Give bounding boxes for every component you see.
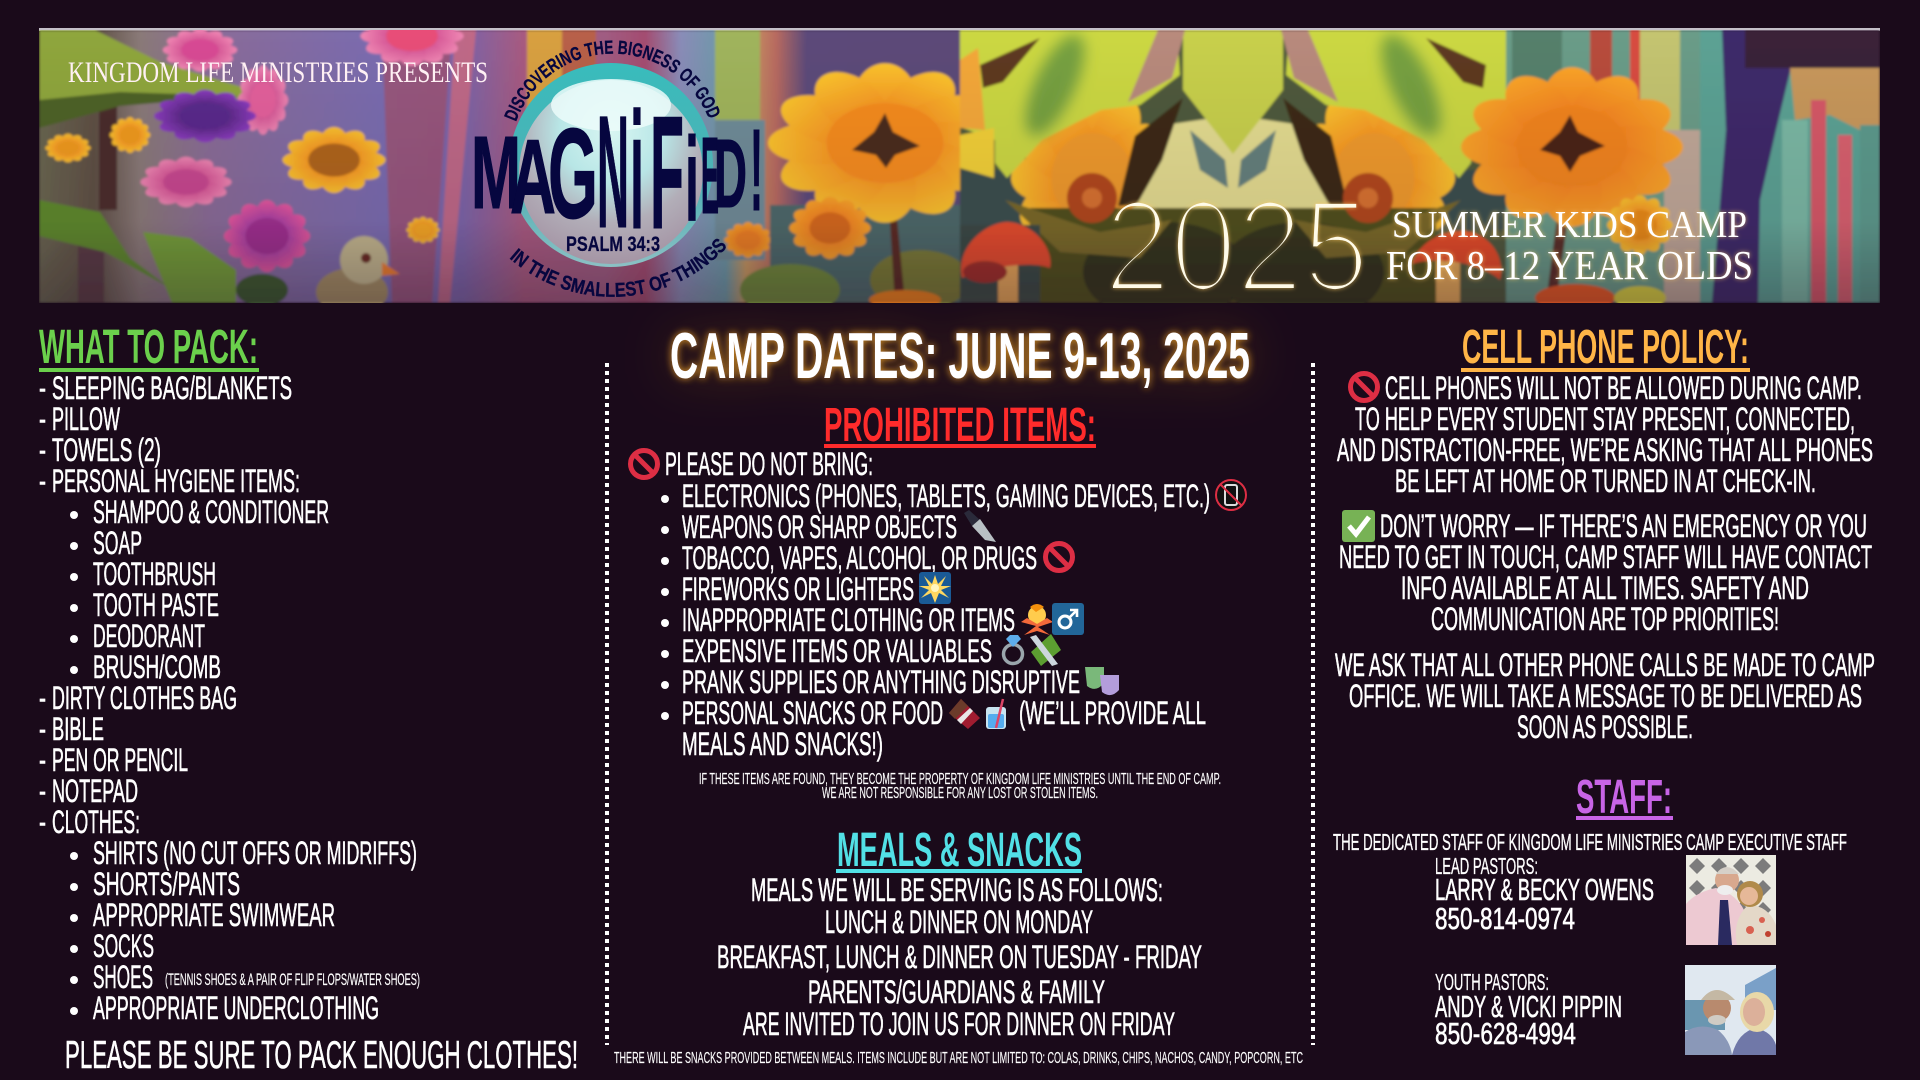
icon: theatre masks: [1085, 667, 1119, 695]
panel: centre column: [614, 319, 1303, 1067]
reassurance paragraph: [1339, 508, 1872, 637]
meals text: LUNCH & DINNER ON MONDAY: [825, 904, 1093, 940]
packing list: SOAP: [93, 525, 142, 561]
icon: drink: [986, 699, 1006, 729]
packing list: SHOES: [93, 959, 153, 995]
right orange flower: [1547, 220, 1568, 289]
lead pastors: LEAD PASTORS:: [1435, 853, 1538, 879]
packing list: -: [39, 432, 46, 468]
heading: prohibited items: PROHIBITED ITEMS:: [824, 399, 1096, 452]
prohibited list: WEAPONS OR SHARP OBJECTS: [682, 509, 957, 545]
youth pastors: 850-628-4994: [1435, 1016, 1576, 1051]
packing list: SHORTS/PANTS: [93, 866, 240, 902]
icon: ring: [1004, 635, 1022, 664]
lower centre foliage: [770, 205, 960, 303]
right trees: [1698, 30, 1860, 303]
prohibited list: ELECTRONICS (PHONES, TABLETS, GAMING DEVICES, ETC.): [682, 478, 1210, 514]
logo word MAGNiFiED!: E: [701, 115, 719, 237]
packing list: SOCKS: [93, 928, 154, 964]
youth pastors: ANDY & VICKI PIPPIN: [1435, 989, 1622, 1024]
packing list: -: [39, 680, 46, 716]
prohibited list: [661, 478, 1210, 762]
packing list: SHIRTS (NO CUT OFFS OR MIDRIFFS): [93, 835, 417, 871]
icon: prohibited: [630, 450, 658, 478]
packing list: BIBLE: [52, 711, 104, 747]
prohibited list: FIREWORKS OR LIGHTERS: [682, 571, 914, 607]
packing list: SHAMPOO & CONDITIONER: [93, 494, 329, 530]
packing list: BRUSH/COMB: [93, 649, 221, 685]
bottom foliage: [1533, 282, 1616, 303]
panel: what to pack: [39, 321, 578, 1077]
icon: fireworks: [919, 572, 951, 604]
packing list: -: [39, 401, 46, 437]
youth pastors: YOUTH PASTORS:: [1435, 969, 1549, 995]
icon: knife: [964, 510, 996, 542]
phone calls paragraph: SOON AS POSSIBLE.: [1517, 709, 1693, 745]
heading: staff: [1576, 771, 1673, 824]
icon: flying money: [1030, 634, 1061, 666]
logo word MAGNiFiED!: N: [597, 82, 629, 261]
prohibited list: (WE’LL PROVIDE ALL: [1019, 695, 1206, 731]
logo arc text bottom: IN THE SMALLEST OF THINGS: [510, 238, 726, 297]
packing list: -: [39, 742, 46, 778]
banner top edge: [39, 28, 1880, 31]
icon: chocolate: [949, 699, 980, 729]
packing list: -: [39, 370, 46, 406]
banner presenter line: KINGDOM LIFE MINISTRIES PRESENTS: [68, 56, 488, 89]
banner camp subtitle: [1386, 204, 1753, 288]
logo word MAGNiFiED!: D: [714, 119, 747, 228]
prohibited list: TOBACCO, VAPES, ALCOHOL, OR DRUGS: [682, 540, 1037, 576]
youth pastors: [1435, 969, 1622, 1051]
heading: meals and snacks: [836, 824, 1082, 877]
bubble: [509, 63, 713, 267]
logo: magnified bubble: [471, 40, 763, 297]
snacks note: THERE WILL BE SNACKS PROVIDED BETWEEN MEALS. ITEMS INCLUDE BUT ARE NOT LIMITED TO: COLAS, DRINKS, CHIPS, NACHOS, CANDY, POPCORN, ETC: [614, 1050, 1303, 1067]
heading: what to pack: [39, 321, 259, 374]
packing list: DIRTY CLOTHES BAG: [52, 680, 237, 716]
dotted column dividers: [607, 363, 1313, 1045]
heading: meals and snacks: MEALS & SNACKS: [837, 824, 1082, 877]
meals text: MEALS WE WILL BE SERVING IS AS FOLLOWS:: [751, 872, 1163, 908]
heading: cell phone policy: [1461, 321, 1750, 374]
packing list: -: [39, 804, 46, 840]
phone calls paragraph: [1335, 647, 1875, 745]
right forest backdrop: [1504, 30, 1702, 303]
packing list: SLEEPING BAG/BLANKETS: [52, 370, 292, 406]
moth dome: [1130, 115, 1336, 215]
meals text: PARENTS/GUARDIANS & FAMILY: [808, 974, 1105, 1010]
banner: !: [750, 105, 763, 235]
lead pastors: LARRY & BECKY OWENS: [1435, 872, 1654, 907]
disclaimer note: [699, 771, 1221, 802]
logo verse: PSALM 34:3: [566, 233, 660, 256]
packing list: APPROPRIATE UNDERCLOTHING: [93, 990, 379, 1026]
banner camp subtitle: FOR 8–12 YEAR OLDS: [1386, 242, 1753, 288]
prohibited intro: PLEASE DO NOT BRING:: [665, 446, 873, 482]
packing list: NOTEPAD: [52, 773, 138, 809]
logo word MAGNiFiED!: A: [510, 118, 556, 236]
prohibited list: PRANK SUPPLIES OR ANYTHING DISRUPTIVE: [682, 664, 1080, 700]
disclaimer note: WE ARE NOT RESPONSIBLE FOR ANY LOST OR STOLEN ITEMS.: [822, 785, 1098, 802]
logo arc text top: DISCOVERING THE BIGNESS OF GOD: [504, 40, 720, 122]
banner: [39, 28, 1880, 319]
packing list: -: [39, 463, 46, 499]
banner camp subtitle: SUMMER KIDS CAMP: [1392, 204, 1747, 246]
forest left leaf: [39, 30, 243, 102]
logo word MAGNiFiED!: G: [548, 103, 598, 246]
logo word MAGNiFiED!: F: [650, 83, 684, 263]
heading: what to pack: WHAT TO PACK:: [39, 321, 258, 374]
moth backdrop and sunflowers: [960, 30, 1510, 303]
meals text: BREAKFAST, LUNCH & DINNER ON TUESDAY - FRIDAY: [717, 939, 1202, 975]
heading: camp dates: CAMP DATES: JUNE 9-13, 2025: [670, 319, 1250, 392]
icon: prohibited: [1350, 374, 1378, 400]
lead pastors: [1435, 853, 1654, 936]
moth lower leaves: [1030, 208, 1436, 303]
heading: prohibited items: [824, 399, 1096, 452]
packing list: -: [39, 711, 46, 747]
icon: no phone: [1216, 480, 1246, 510]
disclaimer note: IF THESE ITEMS ARE FOUND, THEY BECOME THE PROPERTY OF KINGDOM LIFE MINISTRIES UNTIL THE END OF CAMP.: [699, 771, 1221, 788]
photo: youth pastors: [1685, 965, 1776, 1055]
snails: [1067, 173, 1117, 223]
packing list: TOOTH PASTE: [93, 587, 219, 623]
icon: prohibited: [1046, 544, 1072, 570]
packing list: (TENNIS SHOES & A PAIR OF FLIP FLOPS/WATER SHOES): [165, 970, 420, 989]
packing list: TOWELS (2): [52, 432, 161, 468]
moth wings: [960, 30, 1180, 178]
packing list: [39, 370, 420, 1026]
meals text: [717, 872, 1202, 1042]
packing list: APPROPRIATE SWIMWEAR: [93, 897, 335, 933]
icon: person gesturing no: [1021, 604, 1053, 635]
packing list: PILLOW: [52, 401, 120, 437]
panel: right column: [1333, 321, 1875, 1055]
forest flowers: [163, 28, 237, 72]
policy paragraph: [1337, 370, 1873, 499]
lead pastors: 850-814-0974: [1435, 901, 1575, 936]
packing list: -: [39, 773, 46, 809]
heading: staff: STAFF:: [1576, 771, 1672, 824]
moth green shading: [1014, 27, 1452, 143]
icon: check mark: [1342, 510, 1375, 542]
icon: male sign: [1052, 603, 1084, 635]
meals text: ARE INVITED TO JOIN US FOR DINNER ON FRIDAY: [743, 1006, 1175, 1042]
large left orange flower: [766, 61, 962, 225]
logo word MAGNiFiED!: M: [471, 115, 521, 230]
logo word MAGNiFiED!: i: [630, 79, 644, 264]
banner year 2025: 2025: [1104, 172, 1369, 319]
prohibited list: INAPPROPRIATE CLOTHING OR ITEMS: [682, 602, 1015, 638]
banner forest painting: [39, 30, 1880, 303]
packing list: PEN OR PENCIL: [52, 742, 188, 778]
prohibited list: EXPENSIVE ITEMS OR VALUABLES: [682, 633, 992, 669]
forest bird: [315, 268, 389, 303]
packing list: PERSONAL HYGIENE ITEMS:: [52, 463, 300, 499]
mushrooms: [960, 225, 1040, 303]
logo word MAGNiFiED!: [471, 79, 763, 264]
packing list: DEODORANT: [93, 618, 205, 654]
reminder: pack enough clothes: PLEASE BE SURE TO PACK ENOUGH CLOTHES!: [65, 1034, 578, 1077]
photo: lead pastors: [1686, 855, 1776, 945]
packing list: TOOTHBRUSH: [93, 556, 216, 592]
logo word MAGNiFiED!: i: [685, 113, 699, 246]
prohibited list: MEALS AND SNACKS!): [682, 726, 883, 762]
prohibited list: PERSONAL SNACKS OR FOOD: [682, 695, 943, 731]
packing list: CLOTHES:: [52, 804, 140, 840]
